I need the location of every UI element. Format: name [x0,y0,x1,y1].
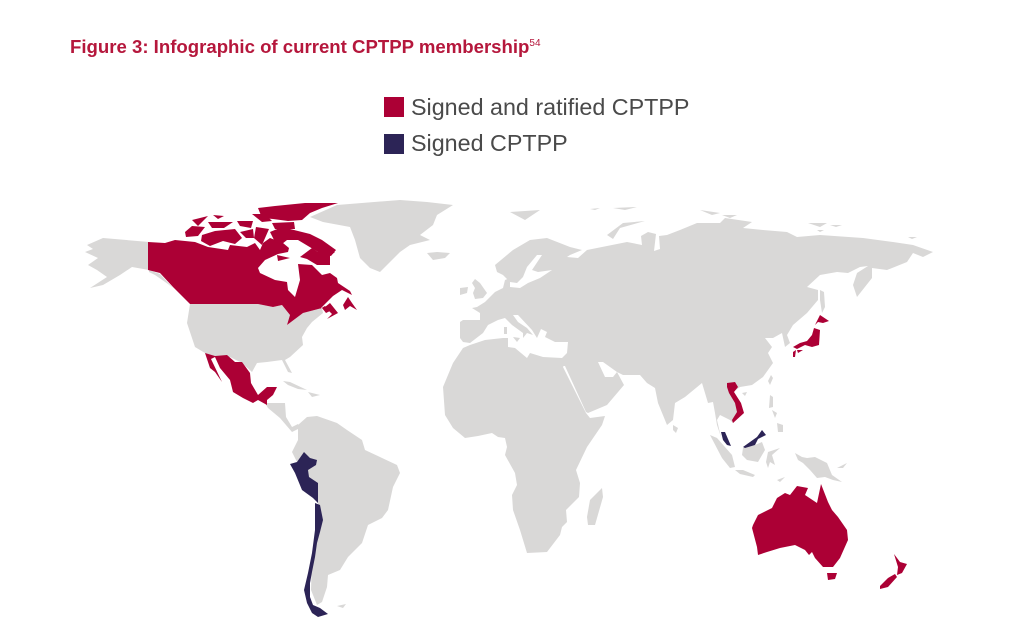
Africa [443,338,605,553]
legend item: signed: Signed CPTPP [411,130,568,156]
Madagascar [587,488,603,525]
legend [384,94,689,156]
New Zealand [880,554,907,589]
Eurasia [460,218,933,440]
signed members [290,430,766,617]
South America [292,416,400,608]
Arctic islands of Russia [590,207,917,239]
Europe islands [427,210,645,342]
Greenland [310,200,453,272]
Malaysia [721,430,766,448]
Japan [793,315,829,357]
Chile [304,503,328,617]
United States [187,304,323,373]
title: Figure 3: Infographic of current CPTPP membership54 [70,36,541,57]
Indonesia and New Guinea [710,435,847,482]
non-member land [85,200,933,608]
Australia [752,484,848,580]
signed and ratified members [148,203,907,589]
East Asia islands [673,290,825,433]
Peru [290,452,318,503]
legend item: signed and ratified: Signed and ratified CPTPP [411,94,689,120]
Mexico [205,353,277,405]
Canada [148,203,357,325]
Central America and Caribbean [265,381,320,432]
Alaska [85,238,173,288]
Vietnam [727,382,744,423]
